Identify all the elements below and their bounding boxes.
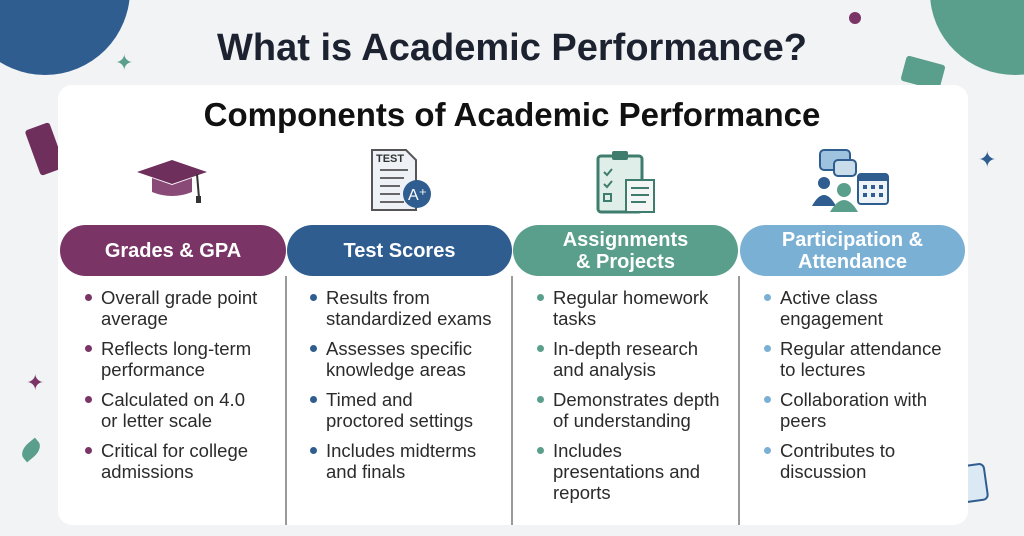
list: grades: admissions [101, 461, 194, 482]
list: assignments: reports [553, 482, 611, 503]
icon: test paper [371, 149, 431, 211]
list: test scores: Results from [326, 287, 430, 308]
list: participation: Regular attendance [780, 338, 941, 359]
list: grades [85, 287, 258, 482]
list: participation: discussion [780, 461, 866, 482]
main card [58, 85, 968, 525]
list: participation: peers [780, 410, 826, 431]
list: assignments: tasks [553, 308, 596, 329]
pill: Assignments & Projects [513, 225, 738, 276]
list: assignments: Includes [553, 440, 622, 461]
list: participation: Collaboration with [780, 389, 927, 410]
decoration: blue circle top-left [0, 0, 130, 75]
icon: graduation cap [137, 160, 207, 203]
pill: Test Scores: Test Scores [344, 240, 455, 262]
icon: people with chat and calendar [812, 149, 889, 212]
list: grades: average [101, 308, 168, 329]
list: grades: Calculated on 4.0 [101, 389, 245, 410]
list: assignments: of understanding [553, 410, 691, 431]
pill: Participation & Attendance: Attendance [798, 250, 907, 272]
decoration: book top right [900, 55, 946, 91]
decoration: sparkle blue: ✦ [978, 147, 996, 172]
list: assignments: and analysis [553, 359, 656, 380]
list: assignments: Regular homework [553, 287, 708, 308]
title: What is Academic Performance? [217, 27, 807, 69]
decoration: sparkle teal: ✦ [115, 50, 133, 75]
decoration: book left [25, 122, 65, 176]
pill: Participation & Attendance: Participation & [782, 228, 923, 250]
pill: Assignments & Projects: Assignments [563, 228, 688, 250]
pill: Assignments & Projects: & Projects [576, 250, 675, 272]
list: participation: to lectures [780, 359, 865, 380]
list: grades: performance [101, 359, 205, 380]
pill: Grades & GPA: Grades & GPA [105, 240, 241, 262]
list: grades: Overall grade point [101, 287, 257, 308]
list: test scores: Includes midterms [326, 440, 476, 461]
list: assignments: Demonstrates depth [553, 389, 720, 410]
list: grades: or letter scale [101, 410, 212, 431]
list: participation: Active class [780, 287, 878, 308]
list: test scores: knowledge areas [326, 359, 466, 380]
pill: Participation & Attendance [740, 225, 965, 276]
decoration: sparkle purple: ✦ [26, 370, 44, 395]
icon: clipboard [596, 151, 655, 214]
list: test scores: Timed and [326, 389, 413, 410]
list: assignments: presentations and [553, 461, 700, 482]
list: grades: Reflects long-term [101, 338, 251, 359]
list: test scores [310, 287, 492, 482]
list: participation: Contributes to [780, 440, 895, 461]
list: participation [764, 287, 941, 482]
icon: test paper: TEST [376, 153, 404, 165]
decoration: leaf [18, 438, 44, 462]
list: test scores: Assesses specific [326, 338, 472, 359]
list: grades: Critical for college [101, 440, 248, 461]
icon: test paper: A⁺ [408, 187, 427, 204]
pill: Test Scores [287, 225, 512, 276]
pill: Grades & GPA [60, 225, 286, 276]
list: test scores: standardized exams [326, 308, 492, 329]
list: test scores: proctored settings [326, 410, 473, 431]
decoration: calendar icon bottom right [943, 462, 989, 506]
list: assignments: In-depth research [553, 338, 698, 359]
decoration: teal circle top-right [930, 0, 1024, 75]
decoration: dot purple [849, 12, 861, 24]
list: participation: engagement [780, 308, 883, 329]
subtitle: Components of Academic Performance [204, 96, 820, 133]
list: test scores: and finals [326, 461, 405, 482]
list: assignments [537, 287, 720, 503]
